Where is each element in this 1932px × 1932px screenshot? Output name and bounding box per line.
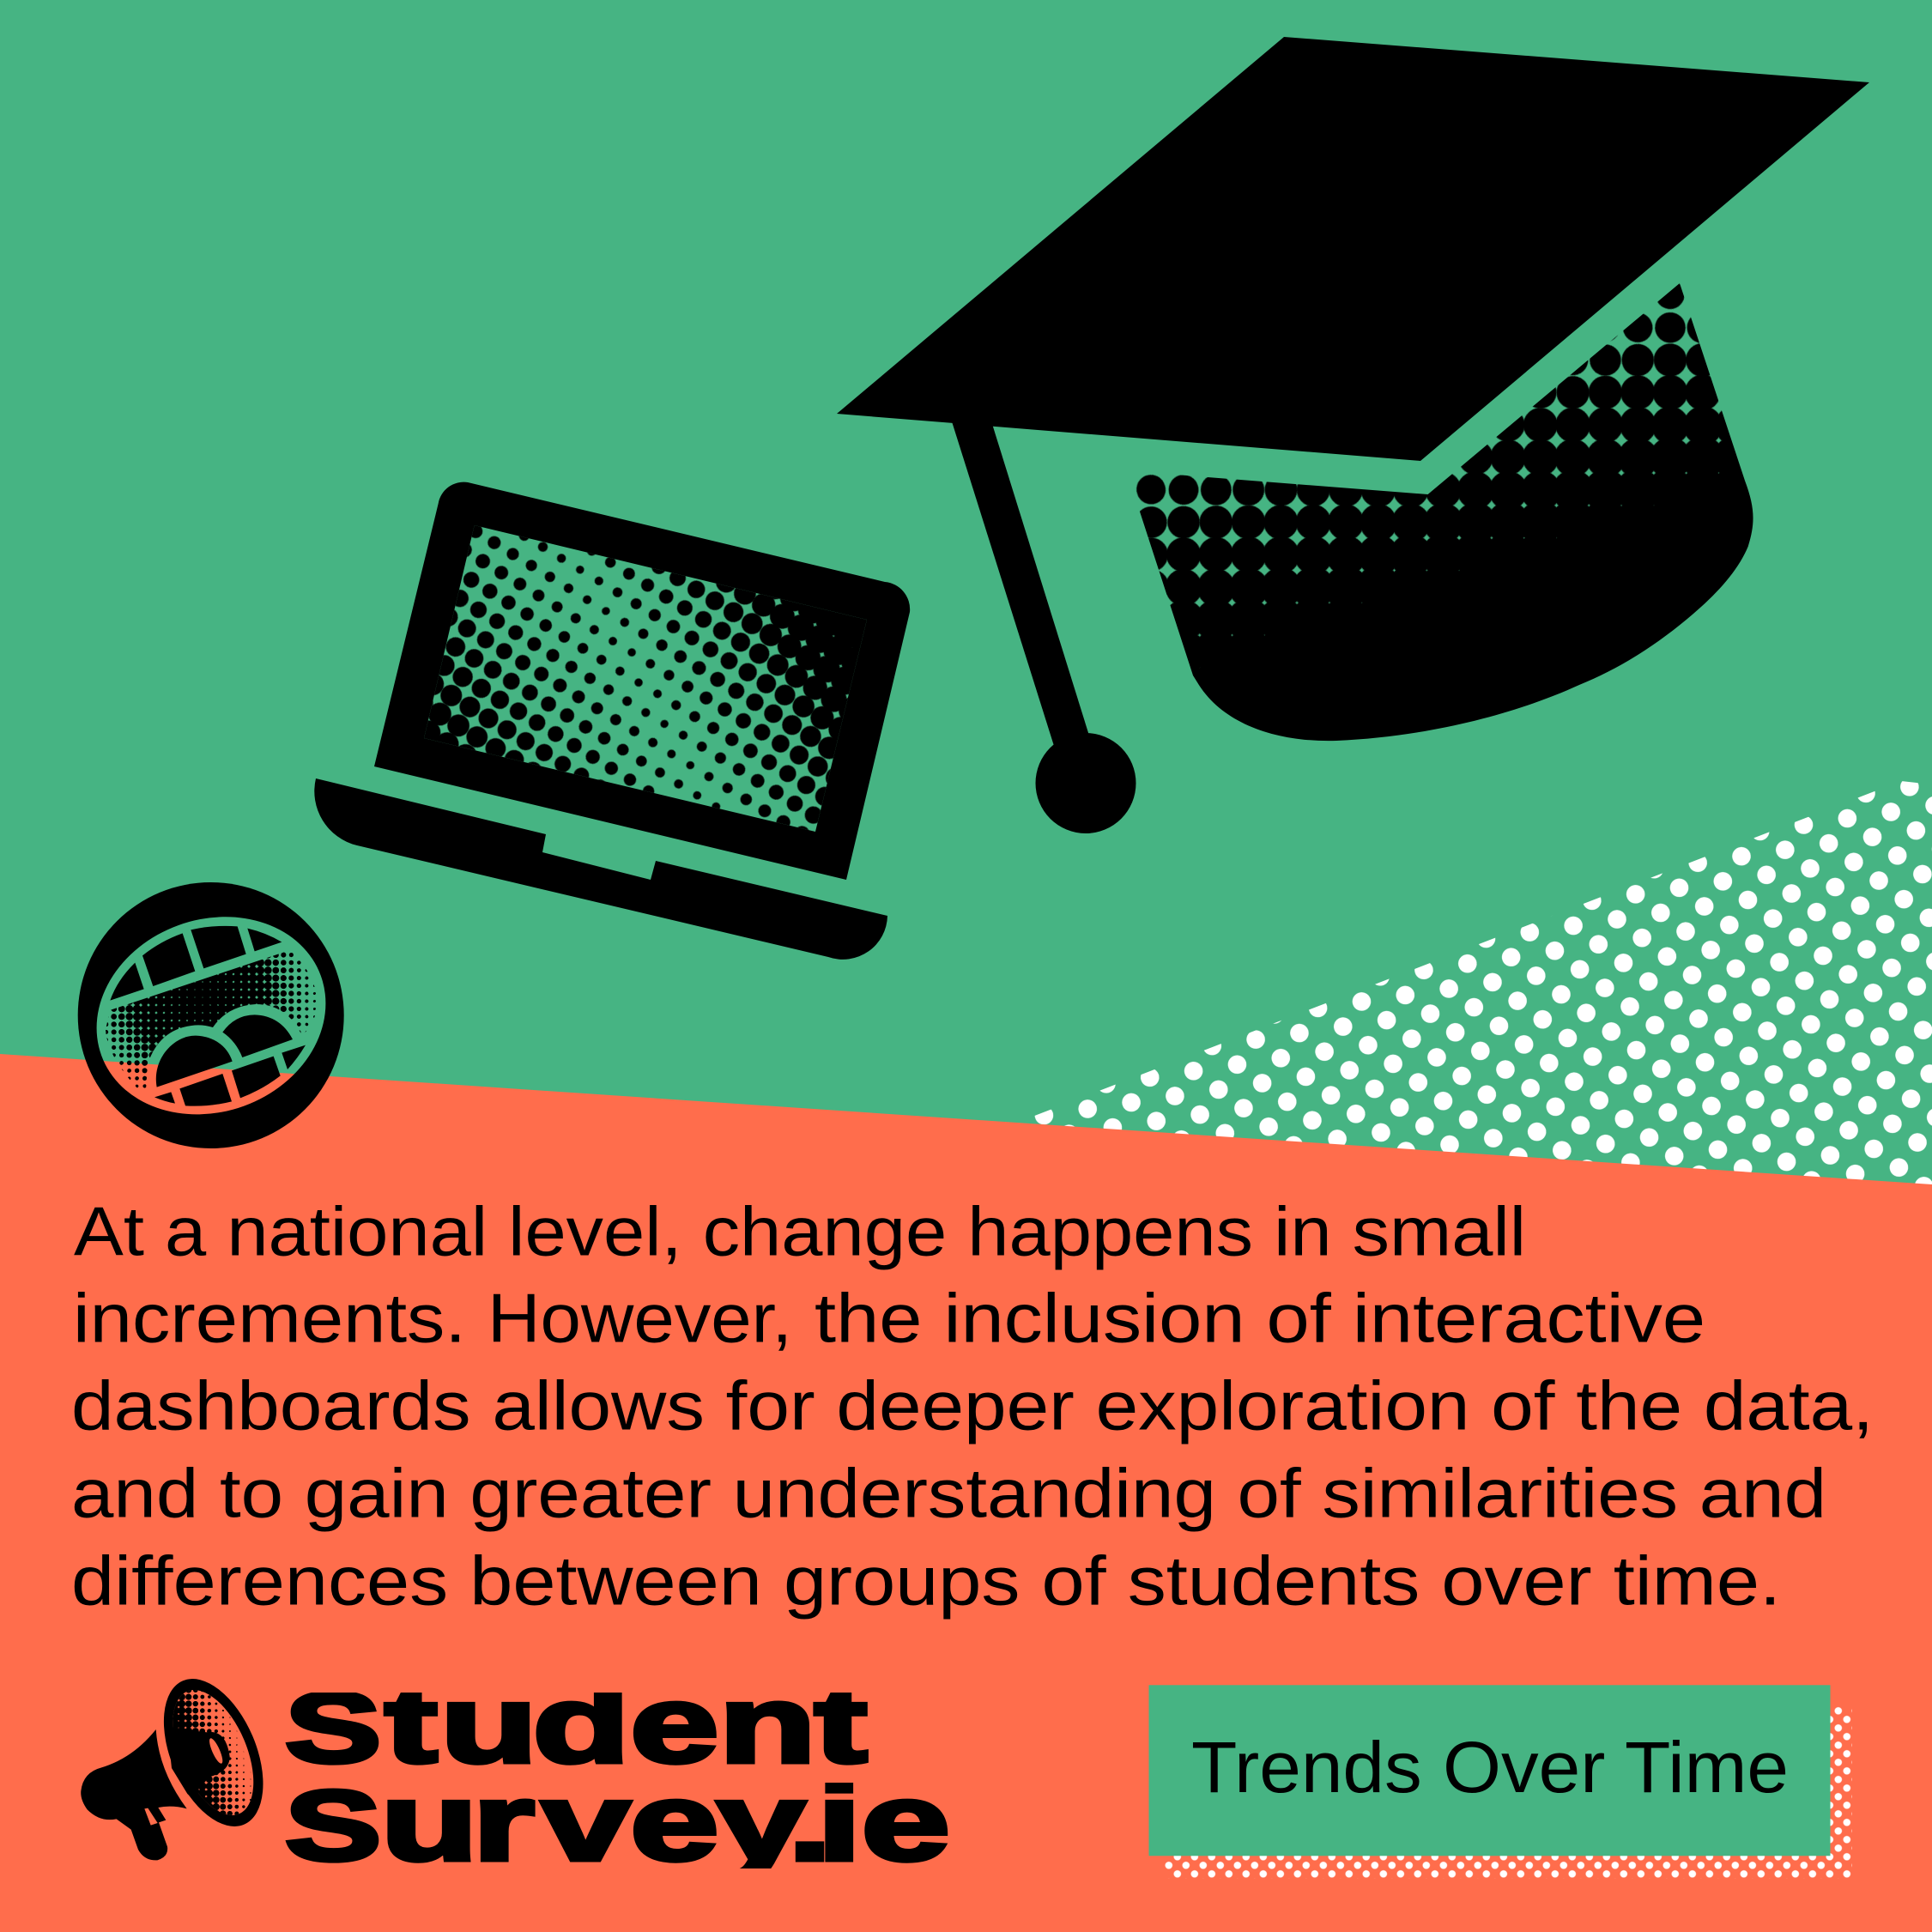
wordmark: Student (285, 1662, 868, 1785)
icon: film-roll badge (77, 882, 344, 1148)
body paragraph: and to gain greater understanding of similarities and (71, 1456, 1826, 1533)
body paragraph: dashboards allows for deeper exploration of the data, (71, 1368, 1874, 1445)
body paragraph: However, (488, 1281, 792, 1358)
badge halftone band (106, 953, 316, 1088)
laptop screen halftone (424, 525, 867, 830)
icon: graduation cap (837, 37, 1869, 833)
body paragraph (71, 1194, 1874, 1620)
body paragraph: increments. (73, 1281, 466, 1358)
green label box: Trends Over Time (1191, 1727, 1789, 1808)
cap crown with halftone (1136, 283, 1753, 742)
badge disc with film cells and domes (77, 882, 344, 1148)
logo: StudentSurvey.ie (81, 1679, 948, 1868)
label: Trends Over Time with dotted shadow (1148, 1685, 1852, 1879)
wordmark: Survey.ie (285, 1760, 950, 1883)
megaphone halftone (173, 1690, 251, 1815)
icon: laptop (314, 482, 910, 960)
body paragraph: the inclusion of interactive (815, 1281, 1705, 1358)
wordmark (285, 1693, 948, 1868)
body paragraph: differences between groups of students over time. (71, 1543, 1781, 1620)
body paragraph: At a national level, change happens in small (74, 1194, 1526, 1271)
